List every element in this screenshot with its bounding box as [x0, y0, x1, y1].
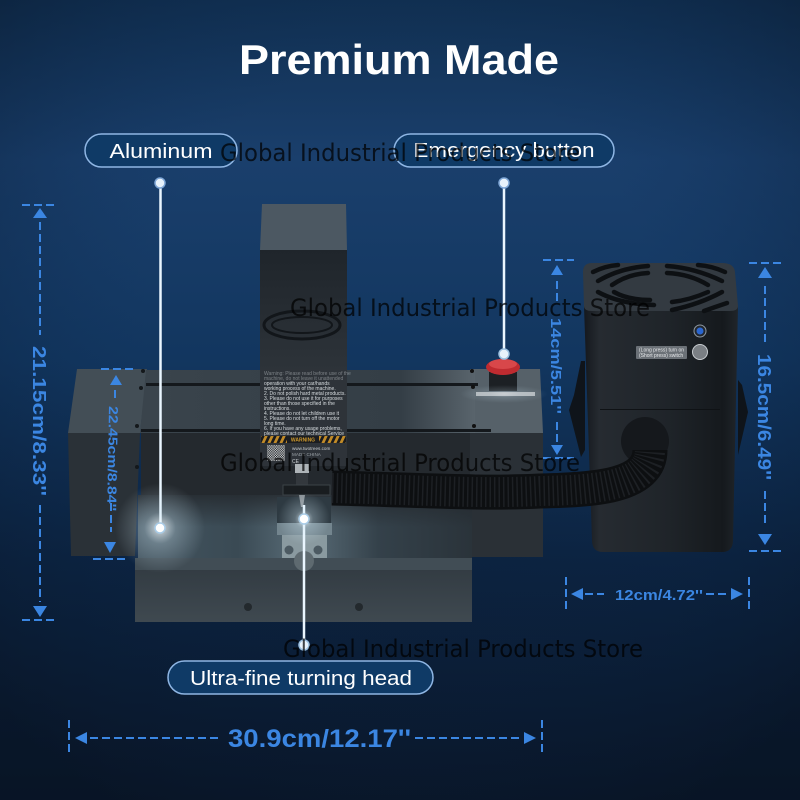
front panel	[135, 558, 472, 622]
hose port	[621, 417, 669, 465]
tower: www.twotrees.com	[292, 446, 330, 451]
right housing	[470, 369, 543, 557]
watermark	[220, 139, 650, 663]
engraving head	[283, 464, 330, 507]
seam	[600, 409, 720, 410]
warning stripe	[261, 436, 346, 444]
control label: (Short press) switch	[639, 353, 683, 359]
top rail panel	[140, 369, 491, 433]
warning label text: long time.	[264, 421, 286, 427]
purifier body	[584, 306, 738, 552]
warning label text: 4. Please do not let children use it	[264, 411, 340, 417]
dimension: 12cm	[566, 577, 749, 610]
callout: aluminum	[85, 134, 237, 573]
purifier top with vents	[583, 263, 738, 311]
warning label text: instructions.	[264, 406, 291, 412]
dimension: height 21.15cm: 21.15cm/8.33''	[29, 346, 49, 496]
air purifier	[569, 263, 748, 552]
warning label text: Warning: Please read before use of the	[264, 371, 351, 377]
tower	[260, 204, 351, 466]
indicator light	[694, 325, 706, 337]
engraving machine	[68, 204, 548, 622]
dimension: 16.5cm	[749, 263, 783, 551]
dimension: 14cm: 14cm/5.51''	[547, 318, 564, 414]
power button	[692, 344, 708, 360]
callout: emergency button: Emergency button	[414, 140, 594, 162]
callout: aluminum: Aluminum	[110, 141, 212, 163]
clamp fixture	[277, 497, 332, 571]
back wall	[141, 433, 470, 495]
dimension: depth 22.45cm	[93, 369, 135, 559]
side latches	[569, 361, 748, 457]
dimension: 30.9cm	[69, 720, 542, 754]
QR code	[267, 445, 285, 461]
lit work floor	[138, 495, 472, 559]
control label: (Long press) turn on	[639, 348, 684, 354]
warning label text: 3. Please do not use it for purposes	[264, 396, 343, 402]
warning label text: 6. If you have any usage problems,	[264, 426, 342, 432]
watermark: Global Industrial Products Store	[290, 294, 650, 322]
warning stripe: WARNING	[291, 438, 315, 444]
title: Premium Made	[239, 36, 559, 83]
watermark: Global Industrial Products Store	[283, 635, 643, 663]
warning label text: machine, do not leave it unattended	[264, 376, 343, 382]
callout: ultra-fine turning head	[168, 493, 433, 694]
callout: ultra-fine turning head: Ultra-fine turning head	[190, 668, 412, 690]
warning label text: please contact our technical Service	[264, 431, 344, 437]
dimension: 12cm: 12cm/4.72''	[615, 587, 703, 604]
watermark: Global Industrial Products Store	[220, 139, 580, 167]
emergency button	[460, 359, 548, 403]
left housing	[68, 369, 147, 556]
control label	[636, 346, 687, 359]
tower: CE	[292, 459, 300, 465]
dimension: 14cm	[543, 260, 574, 458]
tower: MADE CHINA	[292, 452, 322, 457]
dimension: depth 22.45cm: 22.45cm/8.84''	[104, 406, 121, 511]
warning label text: 5. Please do not turn off the motor	[264, 416, 340, 422]
warning label text: 2. Do not polish hard metal products.	[264, 391, 346, 397]
warning label text: operation with your car/hands	[264, 381, 330, 387]
callout: emergency button	[394, 134, 614, 359]
dimension: 30.9cm: 30.9cm/12.17''	[228, 725, 411, 753]
warning label text: other than those specified in the	[264, 401, 335, 407]
warning label text: working process of the machine.	[264, 386, 336, 392]
hose	[332, 450, 650, 492]
watermark: Global Industrial Products Store	[220, 449, 580, 477]
dimension: height 21.15cm	[22, 205, 58, 620]
dimension: 16.5cm: 16.5cm/6.49''	[754, 354, 774, 480]
